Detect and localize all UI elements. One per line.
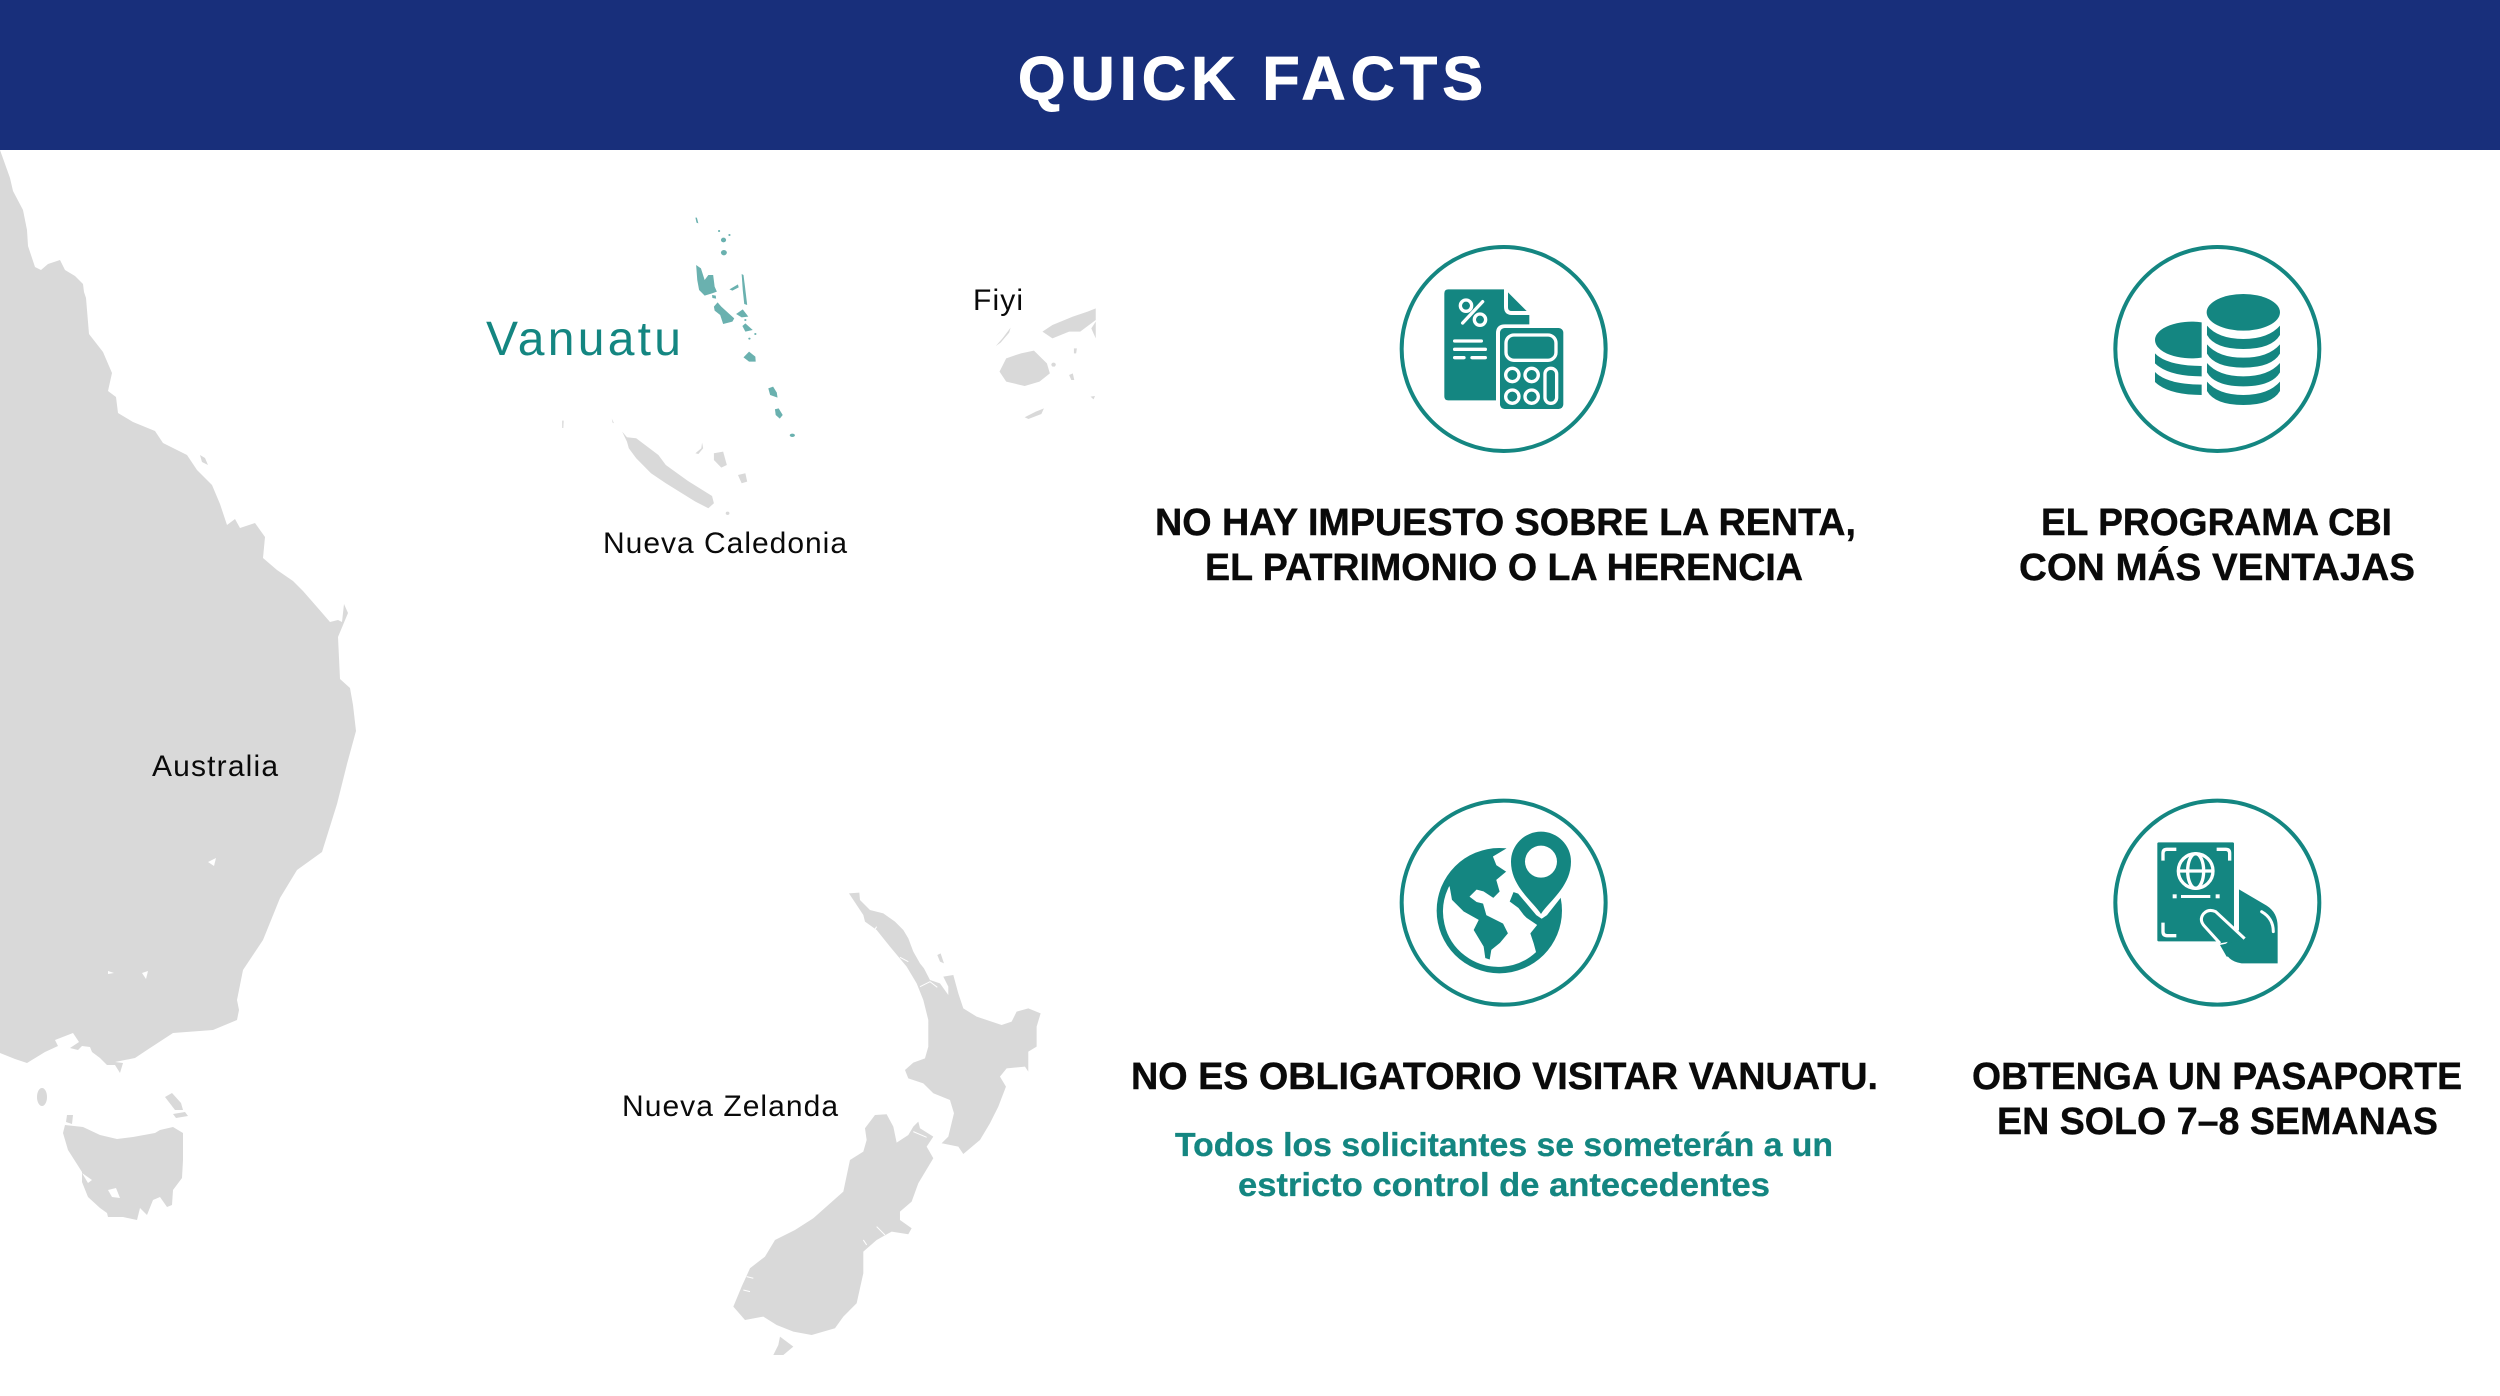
- map: Nueva Caledonia and Fiyi: [562, 308, 1096, 515]
- icon: tax document and calculator: [1402, 247, 1606, 451]
- heading: no taxes: [1155, 502, 1856, 589]
- header banner: [0, 0, 2500, 150]
- title: QUICK FACTS: [1018, 44, 1483, 112]
- icon: passport and hand: [2115, 801, 2319, 1005]
- map: Nueva Zelanda: [733, 893, 1041, 1355]
- heading: best CBI programme: EL PROGRAMA CBI: [2041, 502, 2392, 544]
- heading: passport timing: [1972, 1056, 2462, 1143]
- fact: no visit required: [1131, 801, 1878, 1203]
- Tasmania: [63, 1125, 183, 1220]
- heading: best CBI programme: CON MÁS VENTAJAS: [2019, 545, 2415, 589]
- heading: best CBI programme: [2019, 502, 2415, 589]
- label: Nueva Caledonia: Nueva Caledonia: [603, 527, 847, 560]
- map: Vanuatu islands: [695, 218, 795, 437]
- heading: no visit required: NO ES OBLIGATORIO VISITAR VANUATU.: [1131, 1056, 1878, 1098]
- note: background checks: [1175, 1126, 1833, 1203]
- note: background checks: estricto control de antecedentes: [1238, 1166, 1770, 1203]
- label: Nueva Zelanda: Nueva Zelanda: [622, 1090, 838, 1123]
- label: Vanuatu: Vanuatu: [486, 313, 681, 366]
- icon: globe with location pin: [1402, 801, 1606, 1005]
- fact: passport in 7-8 weeks: [1972, 801, 2462, 1143]
- heading: no taxes: NO HAY IMPUESTO SOBRE LA RENTA,: [1155, 502, 1856, 544]
- fact: best CBI programme: [2019, 247, 2415, 589]
- heading: passport timing: OBTENGA UN PASAPORTE: [1972, 1056, 2462, 1098]
- fact: no taxes: [1155, 247, 1856, 589]
- map: Australia: [0, 150, 356, 1220]
- label: Fiyi: Fiyi: [973, 284, 1023, 317]
- label: Australia: Australia: [152, 750, 278, 783]
- icon: stacks of coins: [2115, 247, 2319, 451]
- heading: no taxes: EL PATRIMONIO O LA HERENCIA: [1205, 547, 1803, 589]
- heading: passport timing: EN SOLO 7–8 SEMANAS: [1997, 1101, 2438, 1143]
- note: background checks: Todos los solicitantes se someterán a un: [1175, 1126, 1833, 1163]
